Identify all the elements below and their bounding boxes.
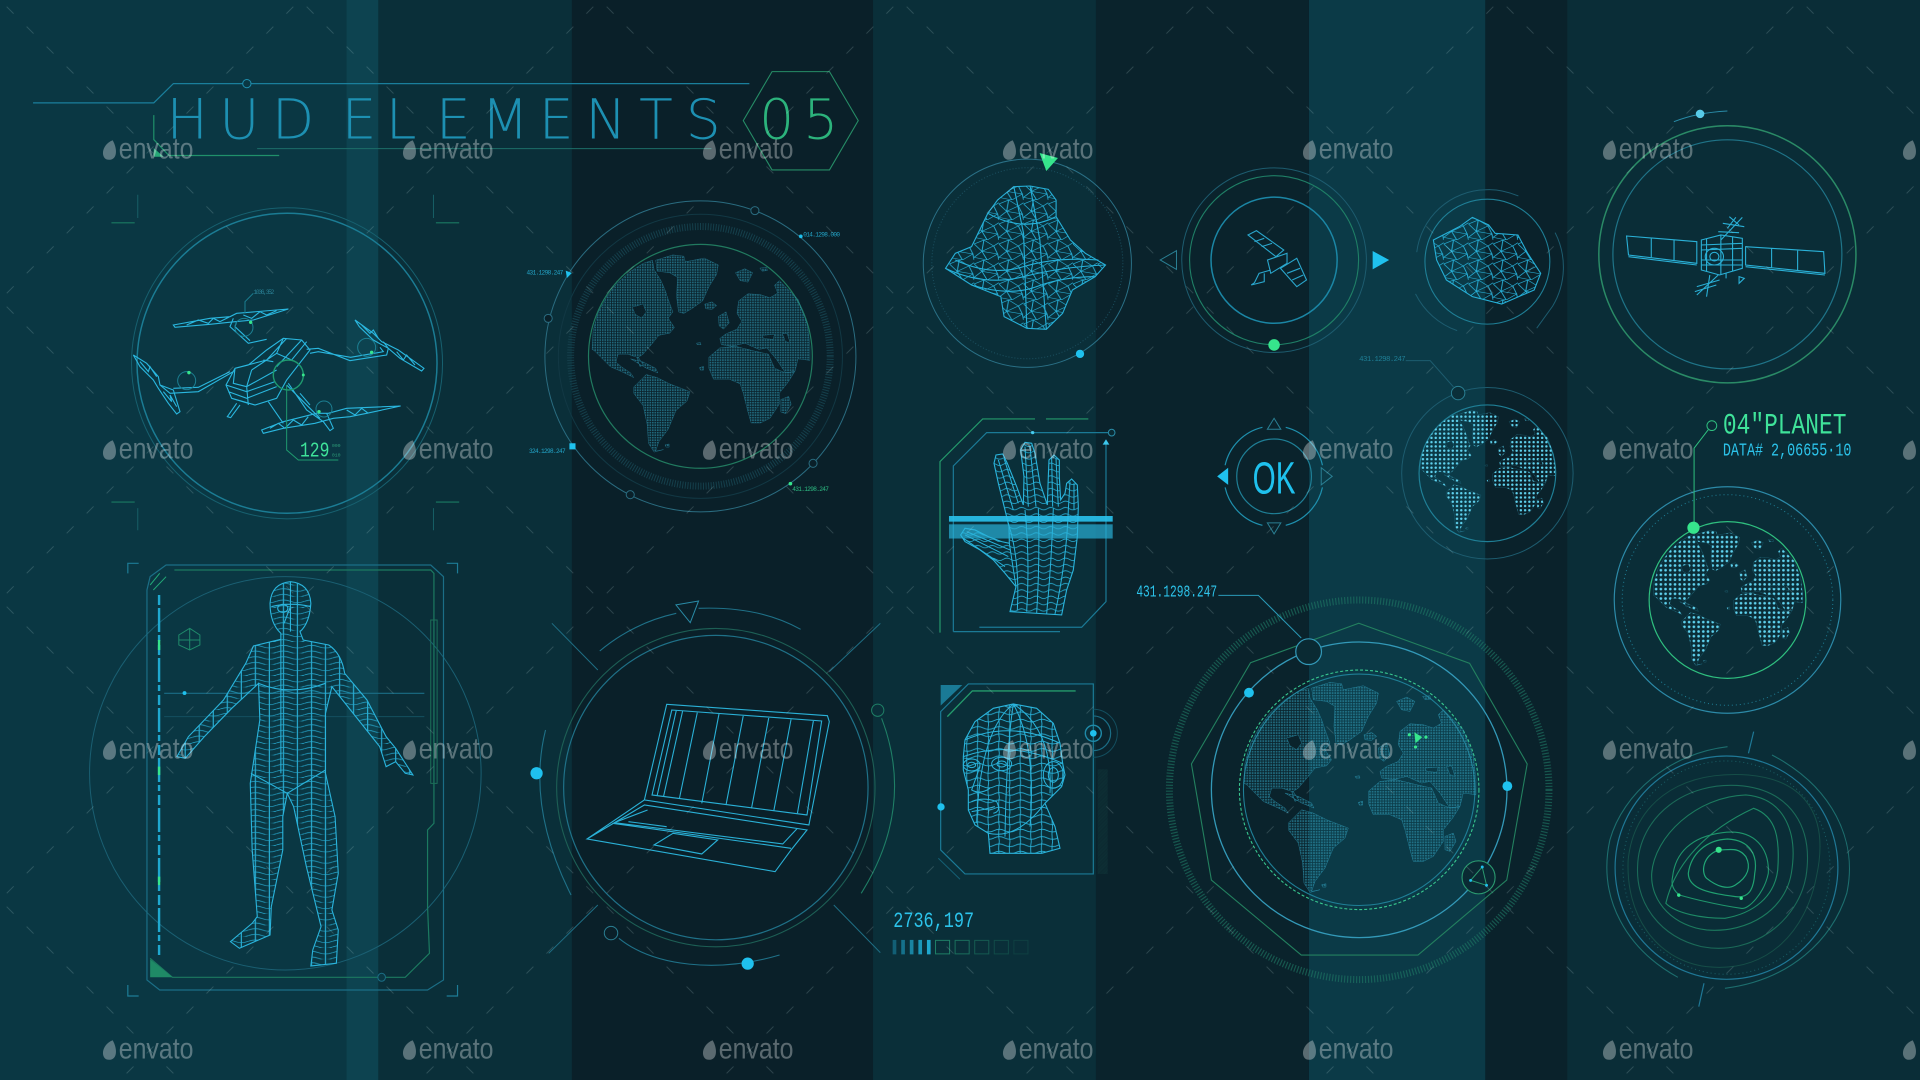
small satellite [1248, 231, 1307, 287]
human wireframe [177, 582, 413, 966]
envato watermarks: envato [1619, 733, 1693, 766]
globe labels: 431.1298.247 [792, 486, 829, 493]
leader and callout [1218, 595, 1301, 638]
planet text: DATA# 2,06655·10 [1723, 441, 1851, 462]
panel: drone scanner [111, 195, 459, 530]
envato watermarks: envato [419, 733, 493, 766]
panel: large satellite [1599, 110, 1856, 383]
planet text: 04″PLANET [1723, 409, 1847, 442]
panel: OK badge [1217, 418, 1332, 534]
earth map [1244, 682, 1476, 892]
panel: contour topography [1607, 732, 1849, 1007]
envato watermarks: envato [419, 1033, 493, 1066]
envato watermarks: envato [1019, 733, 1093, 766]
satellite wireframe [1627, 217, 1825, 297]
heading: HUD ELEMENTS [167, 87, 721, 151]
envato watermarks: envato [419, 133, 493, 166]
counter readout [893, 909, 1028, 954]
map [592, 255, 810, 452]
OK label: OK [1253, 452, 1296, 503]
mesh shape [946, 186, 1106, 329]
hand wireframe [961, 442, 1078, 615]
globe labels: 431.1298.247 [527, 269, 564, 276]
panel: laptop scanner [530, 601, 1028, 970]
envato watermarks: envato [1319, 433, 1393, 466]
envato watermarks: envato [1619, 1033, 1693, 1066]
drone readouts: 000 [332, 443, 341, 449]
panel: asteroid ring [1416, 190, 1563, 331]
envato watermarks: envato [719, 733, 793, 766]
drone wireframe [133, 309, 424, 433]
panel: large earth [1136, 582, 1549, 980]
globe labels: 014.1298.000 [803, 231, 840, 238]
envato watermarks: envato [1619, 133, 1693, 166]
envato watermarks: envato [419, 433, 493, 466]
envato watermarks: envato [1619, 433, 1693, 466]
asteroid mesh [1433, 217, 1541, 304]
envato watermarks: envato [119, 733, 193, 766]
envato watermarks: envato [719, 133, 793, 166]
hexagon number badge [743, 72, 858, 170]
panel: planet readout [1614, 409, 1851, 713]
envato watermarks: envato [719, 433, 793, 466]
network node badge [1462, 861, 1495, 894]
panel: world globe radar [527, 201, 856, 512]
hexagon number badge: 05 [759, 87, 838, 151]
envato watermarks: envato [119, 1033, 193, 1066]
panel: large earth: 431.1298.247 [1136, 582, 1217, 601]
envato watermarks: envato [1319, 1033, 1393, 1066]
panel: mid planet [1359, 356, 1573, 559]
panel: body scan frame [90, 563, 481, 996]
head wireframe [963, 704, 1065, 853]
laptop wireframe [587, 704, 829, 872]
envato watermarks: envato [1019, 133, 1093, 166]
planet text [1723, 409, 1851, 462]
drone readouts [253, 289, 341, 464]
envato watermarks: envato [1319, 733, 1393, 766]
envato watermarks: envato [119, 133, 193, 166]
drone readouts: 129 [300, 441, 329, 464]
title block [33, 72, 858, 170]
panel: hand scanner [940, 419, 1115, 633]
envato watermarks: envato [1019, 433, 1093, 466]
coordinate label: 431.1298.247 [1359, 356, 1406, 364]
panel: face scanner [937, 684, 1117, 879]
drone readouts: 1036,352 [253, 289, 275, 296]
envato watermarks: envato [119, 433, 193, 466]
envato watermarks: envato [719, 1033, 793, 1066]
orbit nodes [544, 207, 817, 499]
globe labels: 324.1298.247 [529, 448, 566, 455]
globe labels [527, 231, 840, 493]
envato watermarks: envato [1319, 133, 1393, 166]
orbit arcs [540, 608, 895, 965]
target rings [1085, 709, 1117, 757]
panel: satellite icon ring [1160, 168, 1389, 353]
panel: terrain mesh [923, 153, 1131, 367]
drone readouts: 010 [332, 453, 341, 459]
scan bar [949, 516, 1113, 539]
counter readout: 2736,197 [893, 909, 974, 934]
envato watermarks: envato [1019, 1033, 1093, 1066]
